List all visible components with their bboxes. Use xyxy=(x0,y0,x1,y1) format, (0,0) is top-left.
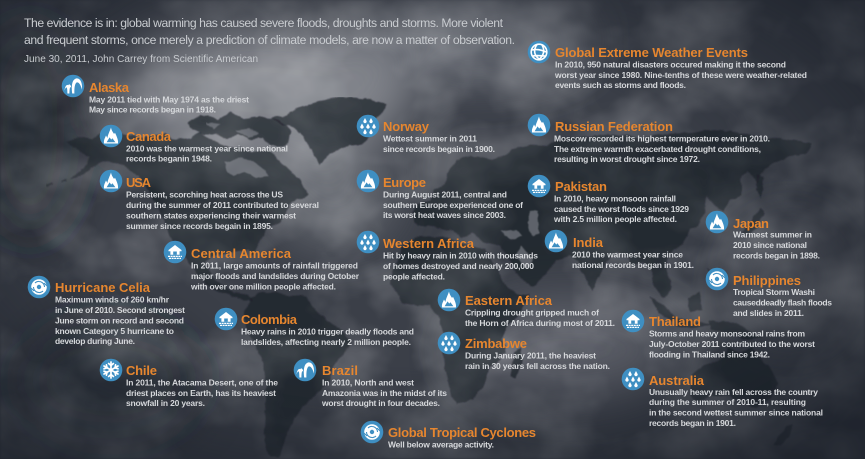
text: Australia: Unusually heavy rain fell across the country xyxy=(649,387,818,397)
entry: Australia xyxy=(622,368,823,428)
text: Pakistan: In 2010, heavy monsoon rainfall xyxy=(554,194,676,204)
icon: drought xyxy=(294,359,316,381)
text: Japan: records began in 1898. xyxy=(733,250,820,260)
entry: Philippines xyxy=(706,268,832,318)
text: Canada xyxy=(126,144,288,164)
text: Russian Federation: Moscow recorded its highest termperature ever in 2010. xyxy=(554,134,770,144)
entry: Norway xyxy=(357,115,495,154)
text: Australia: during the summer of 2010-11, resulting xyxy=(649,397,806,407)
text: Canada: records beganin 1948. xyxy=(126,154,212,164)
japan and sakhalin xyxy=(742,174,764,238)
text: Central America: with over one million people affected. xyxy=(190,282,336,292)
text: Central America: major floods and landslides during October xyxy=(191,271,360,281)
text: Western Africa xyxy=(383,250,538,282)
heading: Alaska: Alaska xyxy=(89,80,130,95)
icon: flood xyxy=(622,310,644,332)
text: Global Extreme Weather Events xyxy=(554,60,807,90)
heading: Hurricane Celia: Hurricane Celia xyxy=(55,280,151,295)
arctic islands xyxy=(187,112,292,146)
icon: flood xyxy=(164,241,186,263)
text: Japan xyxy=(733,230,820,260)
icon: rain xyxy=(438,332,460,354)
text: Brazil xyxy=(321,378,447,408)
text: Pakistan: with 2.5 million people affected. xyxy=(553,214,677,224)
text: Chile: snowfall in 20 years. xyxy=(126,398,205,408)
text: Chile: driest places on Earth, has its heaviest xyxy=(126,388,276,398)
heading: Japan: Japan xyxy=(733,216,769,231)
entry: Western Africa xyxy=(357,231,538,282)
icon: fire xyxy=(545,230,567,252)
entry: Russian Federation xyxy=(528,114,770,164)
indonesia and philippines xyxy=(650,268,716,328)
entry: Canada xyxy=(100,125,288,164)
entry: Europe xyxy=(357,170,523,220)
text: Europe: its worst heat waves since 2003. xyxy=(383,210,506,220)
text: Australia xyxy=(649,387,823,428)
text: Colombia xyxy=(241,326,414,347)
entry: Pakistan xyxy=(528,175,689,224)
text: Norway: since records begain in 1900. xyxy=(383,144,495,154)
entry: Eastern Africa xyxy=(438,289,615,328)
text: Thailand: flooding in Thailand since 1942. xyxy=(649,350,770,360)
text: Hurricane Celia: in June of 2010. Second strongest xyxy=(55,305,185,315)
intro text: The evidence is in: global warming has caused severe floods, droughts and storms. More violent xyxy=(24,16,504,30)
icon: cyclone xyxy=(706,268,728,290)
heading: Philippines: Philippines xyxy=(733,273,801,288)
heading: Central America: Central America xyxy=(191,246,292,261)
entry: Thailand xyxy=(622,310,815,360)
text: Europe xyxy=(383,190,523,220)
text: Hurricane Celia: known Category 5 hurricane to xyxy=(55,326,174,336)
text: Global Extreme Weather Events: worst year since 1980. Nine-tenths of these were weather-related xyxy=(554,70,807,80)
icon: rain xyxy=(622,368,644,390)
heading: Western Africa: Western Africa xyxy=(383,236,475,251)
icon: flood xyxy=(215,308,237,330)
text: Global Extreme Weather Events: events such as storms and floods. xyxy=(555,80,686,90)
text: Zimbabwe: During January 2011, the heaviest xyxy=(465,350,596,360)
icon: fire xyxy=(100,125,122,147)
australia xyxy=(690,346,778,408)
heading: Chile: Chile xyxy=(126,363,157,378)
text: Hurricane Celia: develop during June. xyxy=(55,336,135,346)
entry: Hurricane Celia xyxy=(28,276,185,346)
text: Chile: In 2011, the Atacama Desert, one of the xyxy=(126,378,278,388)
text: USA: southern states experiencing their warmest xyxy=(126,210,296,220)
icon: flood xyxy=(528,175,550,197)
text: Chile xyxy=(126,378,278,408)
text: Colombia: landslides, affecting nearly 2 million people. xyxy=(241,337,411,347)
intro text: June 30, 2011, John Carrey from Scientific American xyxy=(24,54,258,65)
text: Pakistan xyxy=(553,194,689,224)
south america xyxy=(244,292,350,458)
entry: Colombia xyxy=(215,308,414,347)
entry: Brazil xyxy=(294,359,447,408)
text: Global Tropical Cyclones: Well below average activity. xyxy=(388,440,494,450)
heading: Russian Federation: Russian Federation xyxy=(555,119,673,134)
heading: Brazil: Brazil xyxy=(322,363,358,378)
intro text xyxy=(24,16,515,65)
text: India: national records began in 1901. xyxy=(572,260,694,270)
text: Hurricane Celia xyxy=(55,294,185,346)
text: Central America xyxy=(190,260,360,292)
heading: Eastern Africa: Eastern Africa xyxy=(465,293,553,308)
text: Thailand xyxy=(649,328,815,360)
madagascar xyxy=(510,346,522,378)
text: Pakistan: caused the worst floods since 1929 xyxy=(554,204,689,214)
entry: Global Extreme Weather Events xyxy=(528,41,807,90)
text: India: 2010 the warmest year since xyxy=(572,250,683,260)
text: Russian Federation: The extreme warmth exacerbated drought conditions, xyxy=(554,144,761,154)
icon: rain xyxy=(357,231,379,253)
entry: Alaska xyxy=(62,75,249,114)
text: Norway xyxy=(383,134,495,154)
text: Alaska: May 2011 tied with May 1974 as the driest xyxy=(89,94,249,104)
heading: Australia: Australia xyxy=(649,373,705,388)
heading: Global Extreme Weather Events: Global Extreme Weather Events xyxy=(555,45,748,60)
text: Eastern Africa: Crippling drought gripped much of xyxy=(465,308,599,318)
icon: globe xyxy=(528,41,550,63)
entry: USA xyxy=(100,170,319,231)
text: Hurricane Celia: June storm on record and second xyxy=(55,316,184,326)
text: Eastern Africa: the Horn of Africa during most of 2011. xyxy=(465,318,615,328)
heading: Colombia: Colombia xyxy=(241,312,298,327)
icon: fire xyxy=(357,170,379,192)
text: USA: during the summer of 2011 contributed to several xyxy=(126,200,319,210)
text: Global Extreme Weather Events: In 2010, 950 natural disasters occured making it the second xyxy=(555,60,786,70)
heading: Europe: Europe xyxy=(383,175,426,190)
text: Alaska: May since records began in 1918. xyxy=(89,104,216,114)
heading: Thailand: Thailand xyxy=(649,314,701,329)
text: Japan: Warmest summer in xyxy=(733,230,812,240)
icon: rain xyxy=(357,115,379,137)
text: India xyxy=(572,250,694,270)
text: USA: summer since records begain in 1895. xyxy=(126,221,273,231)
africa xyxy=(391,236,530,404)
text: Australia: records began in 1901. xyxy=(649,418,736,428)
text: Japan: 2010 since national xyxy=(733,240,807,250)
text: Canada: 2010 was the warmest year since national xyxy=(126,144,288,154)
icon: fire xyxy=(528,114,550,136)
text: Philippines: Tropical Storm Washi xyxy=(733,287,815,297)
entry: Zimbabwe xyxy=(438,332,610,371)
text: Colombia: Heavy rains in 2010 trigger deadly floods and xyxy=(241,326,414,336)
text: Western Africa: of homes destroyed and nearly 200,000 xyxy=(383,261,534,271)
icon: drought xyxy=(62,75,84,97)
text: Philippines: and slides in 2011. xyxy=(733,308,804,318)
text: Philippines: causeddeadly flash floods xyxy=(733,298,832,308)
entry: India xyxy=(545,230,694,270)
heading: Global Tropical Cyclones: Global Tropical Cyclones xyxy=(388,425,536,440)
text: Thailand: Storms and heavy monsoonal rains from xyxy=(649,328,805,338)
icon: snowflake xyxy=(100,359,122,381)
text: Brazil: worst drought in four decades. xyxy=(321,398,440,408)
icon: cyclone xyxy=(28,276,50,298)
text: Alaska xyxy=(89,94,249,114)
eurasia xyxy=(412,130,812,298)
icon: fire xyxy=(438,289,460,311)
greenland xyxy=(270,97,386,164)
icon: fire xyxy=(100,170,122,192)
heading: USA: USA xyxy=(126,175,152,190)
text: Russian Federation xyxy=(554,134,770,164)
heading: Zimbabwe: Zimbabwe xyxy=(465,336,527,351)
icon: fire xyxy=(706,211,728,233)
entry: Central America xyxy=(164,241,360,292)
text: Thailand: July-October 2011 contributed to the worst xyxy=(649,339,815,349)
text: Australia: in the second wettest summer since national xyxy=(649,408,823,418)
entry: Japan xyxy=(706,211,820,260)
text: Zimbabwe xyxy=(465,350,610,371)
new zealand xyxy=(774,424,792,446)
text: Hurricane Celia: Maximum winds of 260 km/hr xyxy=(55,294,170,304)
text: Western Africa: people affected. xyxy=(383,272,445,282)
text: Brazil: Amazonia was in the midst of its xyxy=(322,388,447,398)
world map silhouette xyxy=(46,97,812,458)
text: Europe: southern Europe experienced one of xyxy=(383,200,523,210)
text: Europe: During August 2011, central and xyxy=(383,190,507,200)
hudson bay, seas xyxy=(206,122,540,268)
heading: Canada: Canada xyxy=(126,129,172,144)
new guinea xyxy=(708,320,762,340)
text: Eastern Africa xyxy=(465,308,615,328)
heading: Norway: Norway xyxy=(383,119,430,134)
intro text: and frequent storms, once merely a prediction of climate models, are now a matter of observation. xyxy=(24,33,515,47)
entry: Global Tropical Cyclones xyxy=(361,421,536,450)
north america xyxy=(67,132,309,300)
text: Zimbabwe: rain in 30 years fell across the nation. xyxy=(465,361,610,371)
text: Central America: In 2011, large amounts of rainfall triggered xyxy=(191,260,358,270)
text: Norway: Wettest summer in 2011 xyxy=(383,134,477,144)
heading: Pakistan: Pakistan xyxy=(555,179,607,194)
text: Russian Federation: resulting in worst drought since 1972. xyxy=(554,154,700,164)
text: Brazil: In 2010, North and west xyxy=(322,378,414,388)
text: Philippines xyxy=(733,287,832,318)
text: Western Africa: Hit by heavy rain in 2010 with thousands xyxy=(383,250,538,260)
text: USA: Persistent, scorching heat across the US xyxy=(126,190,283,200)
text: USA xyxy=(126,190,319,231)
entry: Chile xyxy=(100,359,278,408)
heading: India: India xyxy=(573,235,604,250)
icon: cyclone xyxy=(361,421,383,443)
